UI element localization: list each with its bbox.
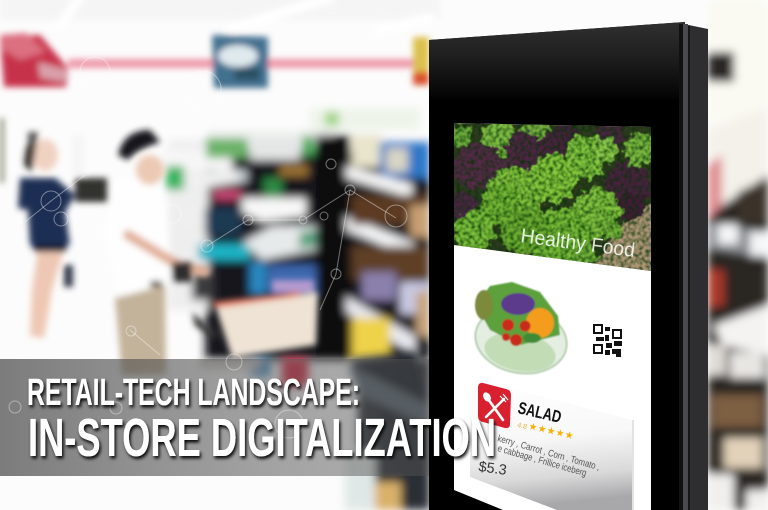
network overlay lines and nodes <box>25 57 407 355</box>
card right shadow <box>632 420 634 510</box>
app icon: fork and spoon <box>478 383 511 428</box>
kiosk side edge <box>679 23 708 510</box>
store shelves left of kiosk <box>162 108 430 360</box>
shopper in navy top <box>0 118 107 338</box>
rating: 4.8 <box>517 422 528 431</box>
title line 2: IN-STORE DIGITALIZATION <box>28 408 496 468</box>
title <box>27 372 496 468</box>
lettuce photo <box>454 123 651 271</box>
salad bowl image <box>474 281 568 376</box>
shelves bottom <box>200 352 430 510</box>
band network nodes <box>9 354 303 438</box>
translucent title band <box>0 359 430 476</box>
shopper with basket <box>104 130 318 375</box>
product card: ★★★★★ <box>527 421 575 442</box>
product card: e cabbage , Frillice iceberg <box>496 443 588 479</box>
ingredient list: kerry , Carrot , Corn , Tomato , <box>496 433 601 473</box>
kiosk body <box>429 22 685 510</box>
digital signage kiosk <box>429 22 708 510</box>
screen <box>448 116 656 510</box>
product card <box>470 378 634 510</box>
kiosk top bezel <box>429 22 685 100</box>
leaf shading texture <box>454 120 652 275</box>
QR code <box>593 324 622 357</box>
price: $5.3 <box>477 459 508 479</box>
screen white background <box>454 120 652 510</box>
shelves right of kiosk <box>708 0 768 510</box>
product name: SALAD <box>516 398 563 427</box>
photo caption: Healthy Food <box>519 225 636 262</box>
ceiling lights and signage <box>0 28 434 94</box>
title line 1: RETAIL-TECH LANDSCAPE: <box>27 372 360 414</box>
